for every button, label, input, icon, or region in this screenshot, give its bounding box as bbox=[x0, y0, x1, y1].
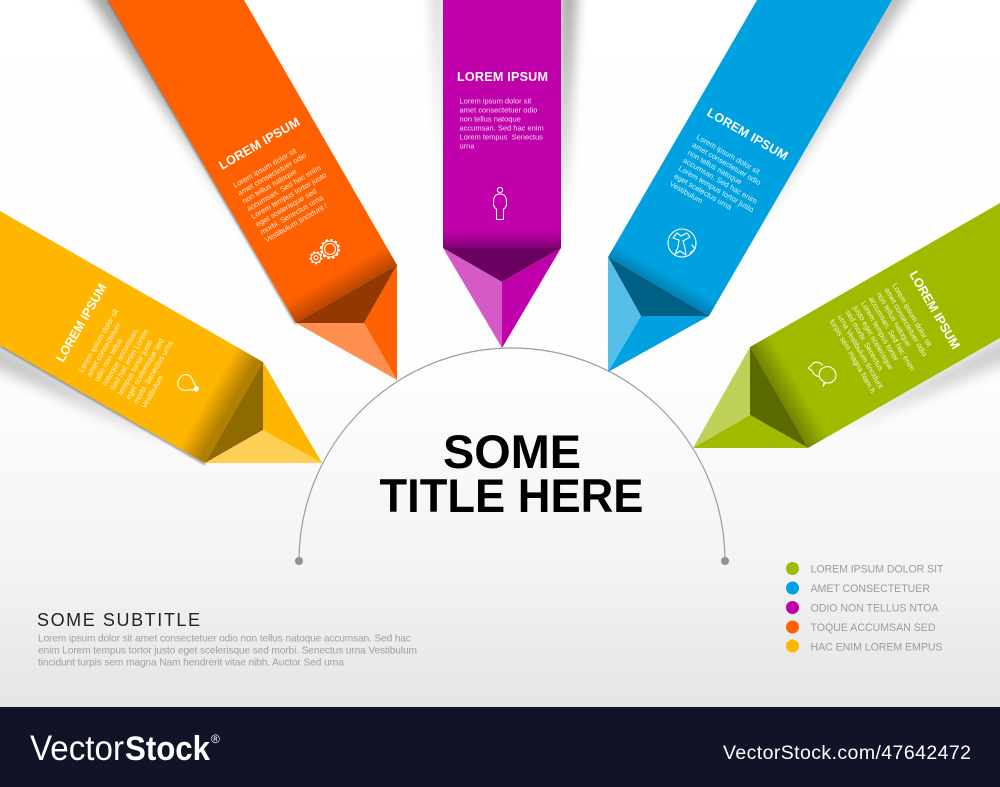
footer bar bbox=[0, 707, 1000, 787]
legend: TOQUE ACCUMSAN SED bbox=[810, 622, 936, 634]
subtitle text block bbox=[38, 634, 417, 668]
footer logo bbox=[30, 729, 220, 768]
orange text: Lorem tempus tortor justo bbox=[250, 170, 328, 221]
yellow text: amet consectetuer bbox=[84, 320, 123, 378]
subtitle text block: tincidunt turpis sem magna Nam hendrerit vitae nibh. Auctor Sed urna bbox=[38, 658, 344, 668]
green text: justo eget scelerisque bbox=[851, 303, 895, 371]
blue text: accumsan. Sed hac enim bbox=[682, 156, 759, 206]
panel: green arrow bbox=[693, 203, 1000, 448]
purple text: urna bbox=[460, 142, 475, 150]
orange text: non tellus natoque bbox=[240, 167, 298, 205]
orange text: Lorem ipsum dolor sit bbox=[232, 146, 299, 190]
footer logo: Vector bbox=[30, 729, 124, 768]
subtitle text block: Lorem ipsum dolor sit amet consectetuer odio non tellus natoque accumsan. Sed hac bbox=[38, 634, 411, 644]
purple text: amet consectetuer odio bbox=[460, 106, 537, 114]
green text: sed morbi. Senectus bbox=[843, 308, 886, 372]
blue text: eget scelectus urna bbox=[672, 171, 734, 212]
panel: purple arrow bbox=[443, 0, 561, 348]
green text: amet consectetuer odio bbox=[882, 286, 929, 358]
yellow heading: LOREM IPSUM bbox=[53, 281, 110, 364]
orange text: amet consectetuer odio bbox=[236, 151, 308, 198]
green heading: LOREM IPSUM bbox=[906, 268, 963, 352]
orange text: morbi. Senectus urna bbox=[258, 193, 325, 237]
panel: yellow arrow bbox=[0, 211, 322, 463]
green text: Lorem ipsum dolor sit bbox=[890, 282, 934, 349]
green text: non tellus natoque bbox=[875, 290, 913, 348]
yellow text: morbi. Senectus urna bbox=[131, 339, 175, 406]
footer logo: ® bbox=[211, 732, 220, 746]
orange text bbox=[232, 146, 329, 244]
legend bbox=[786, 562, 944, 654]
orange heading: LOREM IPSUM bbox=[216, 115, 302, 173]
icon: gears bbox=[310, 240, 339, 263]
yellow text: Vestibulum bbox=[139, 374, 165, 410]
band shadows bbox=[0, 0, 1000, 464]
yellow text: Sed hac enim Lorem bbox=[108, 328, 150, 392]
blue text: non tellus natoque bbox=[686, 148, 744, 186]
blue text: amet consectetuer odio bbox=[690, 140, 763, 187]
blue text: Vestibulum bbox=[668, 179, 704, 205]
green text: accumsan. Sed hac enim bbox=[867, 295, 917, 372]
blue text: Lorem tempus tortor justo bbox=[677, 164, 756, 214]
panel: blue arrow bbox=[608, 0, 892, 372]
title: TITLE HERE bbox=[380, 470, 644, 523]
subtitle text block: enim Lorem tempus tortor justo eget scelerisque sed morbi. Senectus urna Vestibulum bbox=[38, 646, 417, 656]
legend: AMET CONSECTETUER bbox=[810, 583, 930, 595]
yellow text bbox=[77, 307, 175, 410]
green text: turpis sem magna Nam h bbox=[828, 318, 878, 395]
purple text bbox=[460, 96, 544, 150]
footer logo: Stock bbox=[125, 730, 210, 768]
panel: orange arrow bbox=[108, 0, 397, 380]
orange text: eget scelerisque sed bbox=[254, 187, 318, 229]
purple text: Lorem tempus Senectus bbox=[460, 132, 543, 142]
yellow text: eget scelerisque sed bbox=[123, 337, 166, 401]
yellow text: Lorem ipsum dolor sit bbox=[77, 307, 121, 374]
icon: chat bubbles bbox=[808, 362, 836, 386]
subtitle: SOME SUBTITLE bbox=[37, 610, 200, 630]
icon: person bbox=[494, 187, 506, 220]
legend: ODIO NON TELLUS NTOA bbox=[810, 602, 939, 614]
orange text: Vestibulum tincidunt ! bbox=[263, 201, 329, 244]
blue heading: LOREM IPSUM bbox=[704, 105, 790, 163]
title: SOME bbox=[443, 426, 581, 479]
title bbox=[380, 426, 644, 523]
blue text bbox=[668, 132, 763, 214]
green text: Lorem tempus tortor bbox=[859, 300, 901, 363]
legend: HAC ENIM LOREM EMPUS bbox=[810, 642, 942, 654]
purple heading: LOREM IPSUM bbox=[457, 70, 548, 84]
footer image id: VectorStock.com/47642472 bbox=[723, 742, 971, 764]
orange text: accumsan. Sed hac enim bbox=[245, 163, 322, 213]
yellow text: odio non tellus bbox=[92, 336, 124, 383]
purple text: accumsan. Sed hac enim bbox=[460, 124, 544, 132]
blue text: Lorem ipsum dolor sit bbox=[695, 132, 762, 177]
green text: urna Vestibulum tincidunt bbox=[836, 313, 886, 391]
icon: globe bbox=[668, 229, 696, 257]
green text bbox=[828, 282, 934, 395]
yellow text: natoque accumsan. bbox=[100, 326, 141, 388]
legend: LOREM IPSUM DOLOR SIT bbox=[810, 564, 944, 576]
icon: light bulb bbox=[175, 372, 202, 397]
purple text: Lorem ipsum dolor sit bbox=[460, 96, 532, 106]
arc around title bbox=[295, 348, 729, 565]
yellow text: tempus tortor justo bbox=[116, 338, 154, 396]
purple text: non tellus natoque bbox=[460, 114, 521, 124]
